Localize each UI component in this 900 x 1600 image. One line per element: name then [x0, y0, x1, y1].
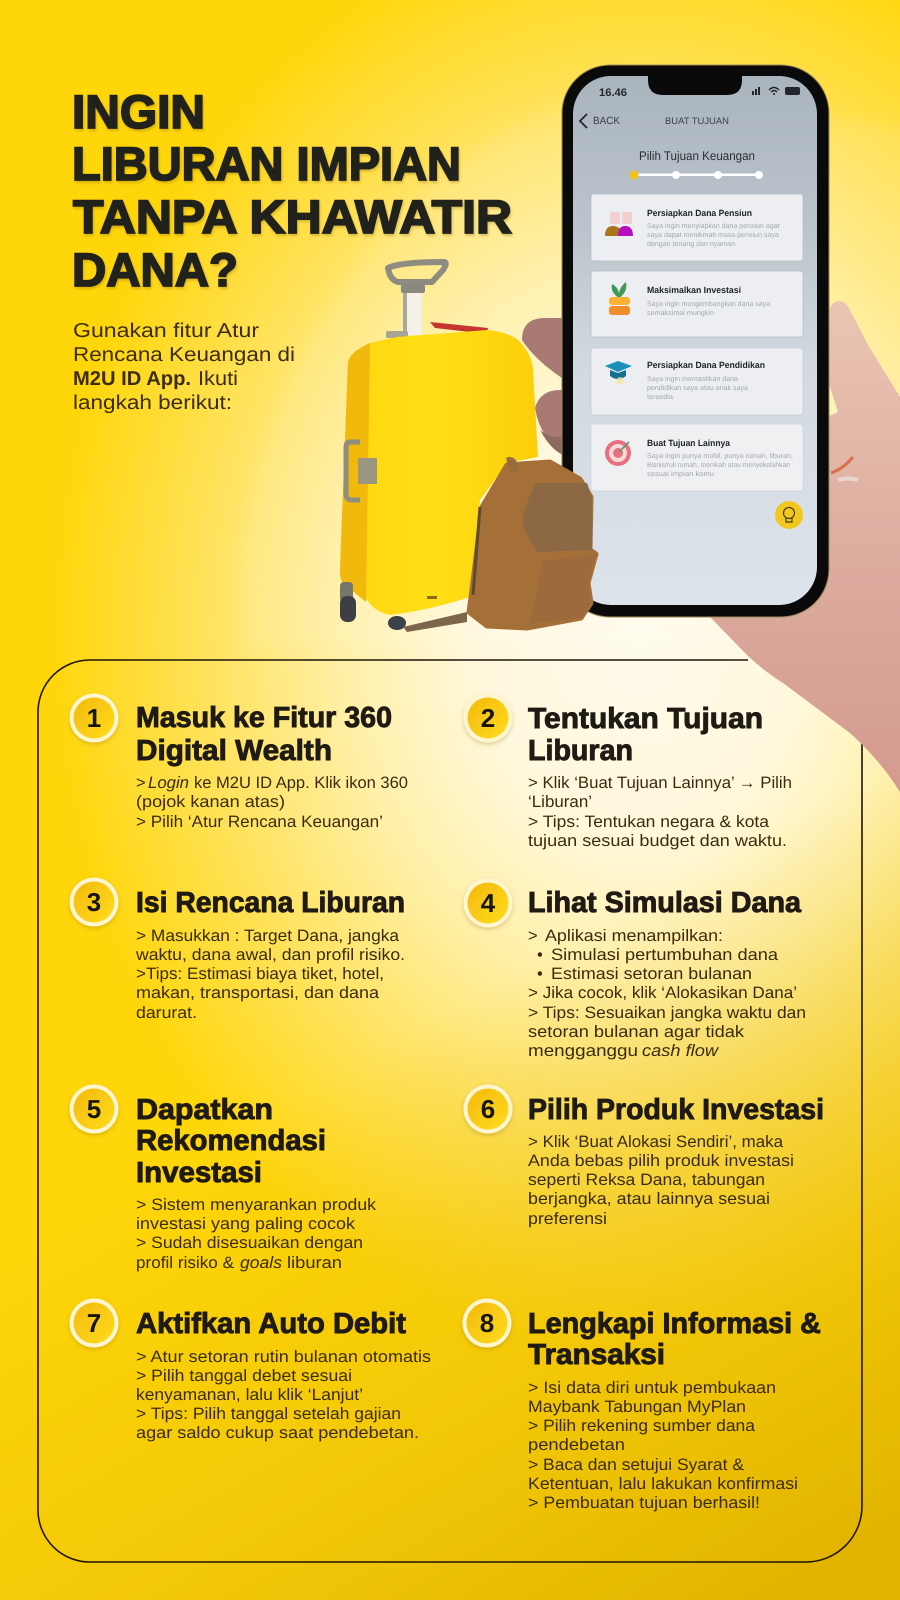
- step 4 text: Simulasi pertumbuhan dana: [551, 946, 779, 964]
- step 6 badge: [464, 1084, 512, 1134]
- step 4 text: •: [537, 965, 543, 983]
- step 7 text: > Atur setoran rutin bulanan otomatis: [136, 1348, 431, 1366]
- step 2 text: tujuan sesuai budget dan waktu.: [528, 832, 787, 850]
- step 5 text: liburan: [287, 1254, 342, 1272]
- step 1 text: >: [136, 774, 146, 792]
- step 1 badge: 1: [87, 703, 101, 733]
- step 4 text: > Tips: Sesuaikan jangka waktu dan: [528, 1004, 806, 1022]
- step 1 heading: [136, 702, 392, 767]
- step 3 badge: 3: [87, 887, 101, 917]
- step 6 text: > Klik ‘Buat Alokasi Sendiri’, maka: [528, 1133, 784, 1151]
- step 8 text: > Baca dan setujui Syarat &: [528, 1456, 744, 1474]
- step 4 text: > Jika cocok, klik ‘Alokasikan Dana’: [528, 984, 797, 1002]
- step 8 heading: Lengkapi Informasi &: [528, 1308, 821, 1340]
- step 1 badge: [70, 694, 118, 742]
- step 5 text: > Sistem menyarankan produk: [136, 1196, 377, 1214]
- step 4 text: >: [528, 927, 538, 945]
- step 3 text: >Tips: Estimasi biaya tiket, hotel,: [136, 965, 384, 983]
- step 7 text: > Tips: Pilih tanggal setelah gajian: [136, 1405, 401, 1423]
- illustration: brown backpack: [403, 457, 596, 632]
- icon: growing plant: [609, 282, 630, 315]
- step 8 heading: Transaksi: [528, 1339, 665, 1371]
- phone screen: Bisnis/ruli rumah, menikah atau menyekolahkan: [647, 461, 790, 469]
- step 2 heading: Tentukan Tujuan: [528, 703, 763, 735]
- step 4: [464, 878, 806, 1060]
- step 8 text: pendebetan: [528, 1436, 625, 1454]
- title: [72, 85, 512, 296]
- step 8 badge: 8: [480, 1308, 494, 1338]
- illustration: hand holding the phone: [522, 301, 900, 792]
- step 8 badge: [462, 1298, 512, 1348]
- intro text: langkah berikut:: [73, 392, 232, 414]
- step 1 heading: Digital Wealth: [136, 735, 332, 767]
- step 8 text: > Pembuatan tujuan berhasil!: [528, 1494, 760, 1512]
- step 7 badge: [70, 1298, 118, 1348]
- step 4 badge: [464, 878, 512, 928]
- step 1 text: > Pilih ‘Atur Rencana Keuangan’: [136, 813, 383, 831]
- step 3 text: darurat.: [136, 1004, 197, 1022]
- step 7 badge: 7: [87, 1308, 101, 1338]
- title: INGIN: [72, 85, 205, 138]
- phone screen: saya dapat menikmati masa pensiun saya: [647, 231, 779, 239]
- phone screen: Saya ingin mengembangkan dana saya: [647, 300, 770, 308]
- intro text: M2U ID App.: [73, 368, 191, 390]
- step 2 text: ‘Liburan’: [528, 793, 592, 811]
- title: DANA?: [72, 243, 238, 296]
- step 2 badge: [464, 694, 512, 742]
- step 4 heading: Lihat Simulasi Dana: [528, 887, 802, 919]
- step 4 text: Estimasi setoran bulanan: [551, 965, 752, 983]
- step 4 text: mengganggu: [528, 1042, 638, 1060]
- step 6 heading: Pilih Produk Investasi: [528, 1094, 824, 1126]
- step 3 text: waktu, dana awal, dan profil risiko.: [135, 946, 405, 964]
- icon: graduation cap: [605, 361, 632, 385]
- phone screen: Saya ingin menyiapkan dana pensiun agar: [647, 222, 781, 230]
- phone screen: Saya ingin memastikan dana: [647, 375, 738, 383]
- step 1 heading: Masuk ke Fitur 360: [136, 702, 392, 734]
- phone screen: BACK: [593, 115, 620, 127]
- step 2 text: > Tips: Tentukan negara & kota: [528, 813, 770, 831]
- step 6 text: [528, 1133, 794, 1228]
- step 5 heading: Rekomendasi: [136, 1125, 326, 1157]
- step 8 text: > Isi data diri untuk pembukaan: [528, 1379, 776, 1397]
- step 1: [70, 694, 408, 831]
- icon: tips bulb: [775, 501, 803, 529]
- step 2 text: > Klik ‘Buat Tujuan Lainnya’ → Pilih: [528, 774, 792, 792]
- illustration: phone: [562, 65, 829, 617]
- step 6 text: preferensi: [528, 1210, 607, 1228]
- step 2 badge: 2: [481, 703, 495, 733]
- step 5 badge: 5: [87, 1094, 101, 1124]
- phone screen: BUAT TUJUAN: [665, 116, 729, 127]
- step 4 text: cash flow: [642, 1042, 719, 1060]
- step 6 text: Anda bebas pilih produk investasi: [528, 1152, 794, 1170]
- phone screen: Maksimalkan Investasi: [647, 285, 741, 295]
- step 5 heading: Dapatkan: [136, 1094, 273, 1126]
- title: TANPA KHAWATIR: [73, 190, 512, 243]
- step 6 badge: 6: [481, 1094, 495, 1124]
- step 5 text: investasi yang paling cocok: [136, 1215, 356, 1233]
- step 5 text: goals: [240, 1254, 282, 1272]
- intro text: Gunakan fitur Atur: [73, 320, 259, 342]
- step 7 heading: Aktifkan Auto Debit: [136, 1308, 406, 1340]
- phone screen: Persiapkan Dana Pendidikan: [647, 360, 765, 370]
- step 8 text: Maybank Tabungan MyPlan: [528, 1398, 746, 1416]
- phone screen: 16.46: [599, 87, 627, 99]
- phone screen: Persiapkan Dana Pensiun: [647, 208, 752, 218]
- phone screen: sesuai impian kamu: [647, 470, 714, 478]
- step 7 text: [136, 1348, 431, 1442]
- phone screen: Pilih Tujuan Keuangan: [639, 149, 755, 163]
- step 7: [70, 1298, 431, 1442]
- step 4 text: Aplikasi menampilkan:: [545, 927, 723, 945]
- step 1 text: (pojok kanan atas): [136, 793, 285, 811]
- step 6 text: seperti Reksa Dana, tabungan: [528, 1171, 765, 1189]
- phone screen: semaksimal mungkin: [647, 309, 714, 317]
- step 5 badge: [70, 1084, 118, 1134]
- illustration: yellow suitcase: [340, 262, 538, 630]
- step 1 text: ke M2U ID App. Klik ikon 360: [194, 774, 408, 792]
- step 8 text: [528, 1379, 798, 1512]
- icon: target: [605, 440, 631, 466]
- step 1 text: [136, 774, 408, 831]
- step 8 text: > Pilih rekening sumber dana: [528, 1417, 756, 1435]
- step 7 text: agar saldo cukup saat pendebetan.: [136, 1424, 419, 1442]
- step 5 heading: [136, 1094, 326, 1189]
- step 5 heading: Investasi: [136, 1157, 262, 1189]
- phone screen: [573, 76, 817, 605]
- step 3 heading: Isi Rencana Liburan: [136, 887, 405, 919]
- step 3 text: makan, transportasi, dan dana: [136, 984, 380, 1002]
- step 5: [70, 1084, 377, 1272]
- step 5 text: > Sudah disesuaikan dengan: [136, 1234, 363, 1252]
- step 4 badge: 4: [481, 888, 496, 918]
- step 2 heading: [528, 703, 763, 767]
- step 8 heading: [528, 1308, 821, 1371]
- step 8 text: Ketentuan, lalu lakukan konfirmasi: [528, 1475, 798, 1493]
- intro text: Rencana Keuangan di: [73, 344, 295, 366]
- phone screen: pendidikan saya atau anak saya: [647, 384, 748, 392]
- phone screen: Buat Tujuan Lainnya: [647, 438, 731, 448]
- intro text: Ikuti: [198, 368, 238, 390]
- icon: retirement couple: [605, 212, 633, 236]
- step 3: [70, 878, 405, 1022]
- panel: steps outline: [38, 660, 862, 1562]
- step 1 text: Login: [148, 774, 189, 792]
- phone screen: tersedia: [647, 393, 673, 401]
- step 7 text: > Pilih tanggal debet sesuai: [136, 1367, 352, 1385]
- step 7 text: kenyamanan, lalu klik ‘Lanjut’: [136, 1386, 363, 1404]
- step 2 heading: Liburan: [528, 735, 633, 767]
- step 4 text: setoran bulanan agar tidak: [528, 1023, 745, 1041]
- phone screen: dengan tenang dan nyaman: [647, 240, 735, 248]
- step 5 text: profil risiko &: [136, 1254, 234, 1272]
- step 4 text: •: [537, 946, 543, 964]
- phone screen: Saya ingin punya mobil, punya rumah, liburan,: [647, 452, 793, 460]
- step 3 text: [135, 927, 405, 1022]
- step 8: [462, 1298, 821, 1512]
- step 2 text: [528, 774, 792, 850]
- step 6: [464, 1084, 824, 1228]
- step 2: [464, 694, 792, 850]
- step 4 text: [528, 927, 806, 1060]
- intro text: [73, 320, 295, 414]
- title: LIBURAN IMPIAN: [72, 137, 461, 190]
- step 3 text: > Masukkan : Target Dana, jangka: [136, 927, 400, 945]
- step 6 text: berjangka, atau lainnya sesuai: [528, 1190, 770, 1208]
- step 5 text: [136, 1196, 377, 1272]
- step 3 badge: [70, 878, 118, 926]
